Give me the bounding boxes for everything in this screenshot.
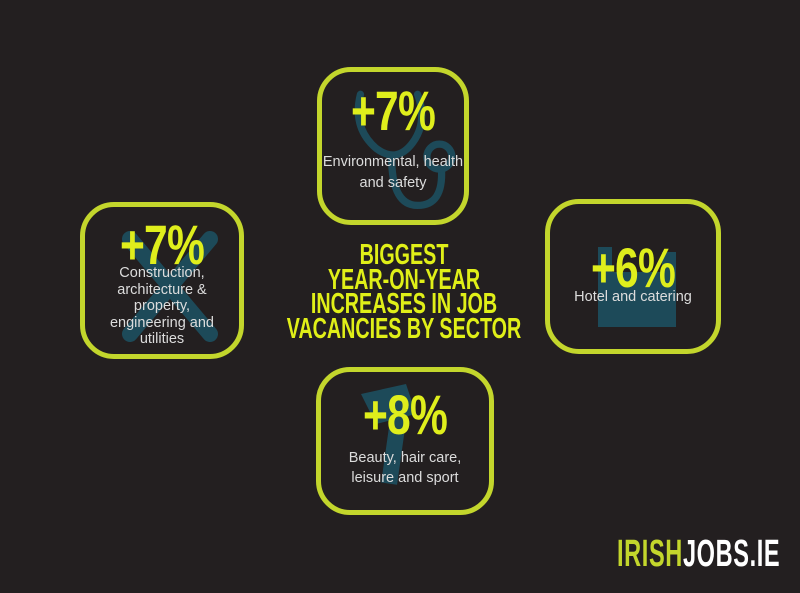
label: architecture & [117,282,207,298]
title: INCREASES IN JOB [311,288,497,320]
label: Construction, [119,265,205,281]
icon: building [598,247,676,327]
panel: construction [80,202,244,359]
title: YEAR-ON-YEAR [328,264,480,296]
percentage +7%: +7% [351,79,435,142]
label: utilities [140,331,184,347]
percentage +7%: +7% [120,213,204,276]
percentage +6%: +6% [591,236,675,299]
label: property, [134,298,190,314]
percentage +8%: +8% [363,383,447,446]
panel: hotel and catering [545,199,721,354]
label: leisure and sport [351,470,459,486]
title: BIGGEST [360,239,448,271]
icon: stethoscope [354,90,456,209]
label [323,154,463,191]
title: VACANCIES BY SECTOR [287,312,521,344]
label: Hotel and catering [574,289,692,305]
label [110,265,214,347]
logo: IRISHJOBS.IE [617,533,780,575]
label: Beauty, hair care, [349,450,461,466]
label [349,450,461,486]
icon: hairdryer [361,384,412,485]
title [286,239,521,344]
panel: environmental health [317,67,469,225]
icon: tools [122,231,218,342]
label: and safety [360,175,426,191]
label: Environmental, health [323,154,463,170]
label: engineering and [110,314,214,330]
panel: beauty [316,367,494,515]
